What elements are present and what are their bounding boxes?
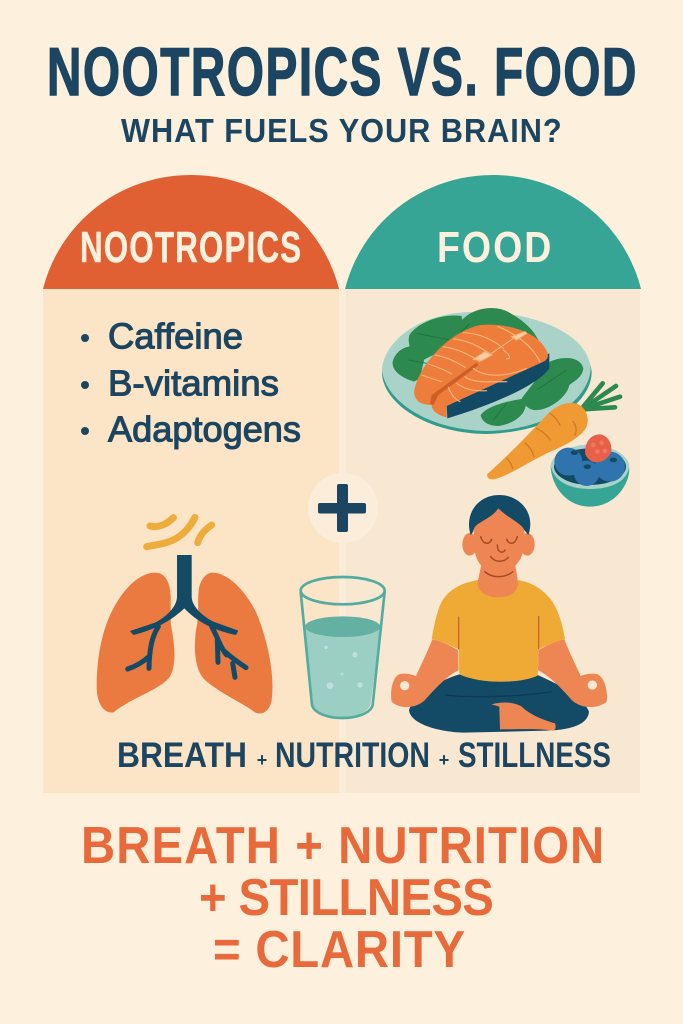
centre divider	[339, 289, 346, 793]
conclusion: = CLARITY	[213, 920, 465, 979]
right lung	[195, 573, 272, 713]
salmon skin	[447, 353, 549, 418]
conclusion	[81, 816, 604, 979]
plate	[382, 312, 592, 434]
ears	[462, 533, 477, 556]
caption	[117, 736, 611, 775]
nootropics list: Caffeine	[108, 316, 243, 356]
arms	[391, 639, 459, 707]
icon: lungs with breath	[97, 517, 272, 713]
breath swirls	[147, 517, 212, 547]
caption: STILLNESS	[458, 736, 611, 775]
neck	[477, 563, 518, 597]
panel: nootropics	[43, 175, 339, 793]
left lung	[97, 573, 174, 713]
face	[474, 503, 525, 574]
panel: food	[345, 175, 641, 793]
bronchi	[130, 555, 238, 635]
nootropics list: Adaptogens	[108, 408, 301, 450]
nootropics heading: NOOTROPICS	[80, 224, 301, 272]
conclusion: BREATH + NUTRITION	[81, 816, 604, 875]
icon: salmon plate	[382, 308, 592, 434]
food dome header	[345, 175, 641, 289]
food heading: FOOD	[437, 222, 551, 272]
caption: NUTRITION	[275, 736, 430, 775]
nootropics list: B-vitamins	[108, 362, 279, 404]
nootropics dome header	[43, 175, 339, 289]
subtitle: WHAT FUELS YOUR BRAIN?	[121, 112, 562, 149]
face details	[481, 537, 517, 577]
foot	[492, 703, 556, 731]
legs	[409, 674, 589, 733]
icon: meditating person	[391, 495, 607, 733]
plus symbol	[308, 473, 378, 543]
hair	[469, 495, 530, 535]
salmon flesh	[414, 325, 548, 417]
title: NOOTROPICS VS. FOOD	[47, 35, 636, 110]
spinach leaves	[458, 308, 538, 353]
caption: +	[439, 750, 449, 770]
caption: +	[257, 750, 267, 770]
caption: BREATH	[117, 736, 247, 775]
conclusion: + STILLNESS	[199, 868, 494, 927]
nootropics list	[81, 316, 301, 450]
icon: carrot	[487, 383, 620, 479]
icon: berry bowl	[551, 434, 629, 507]
shirt	[432, 580, 565, 682]
icon: glass of water	[301, 577, 385, 718]
